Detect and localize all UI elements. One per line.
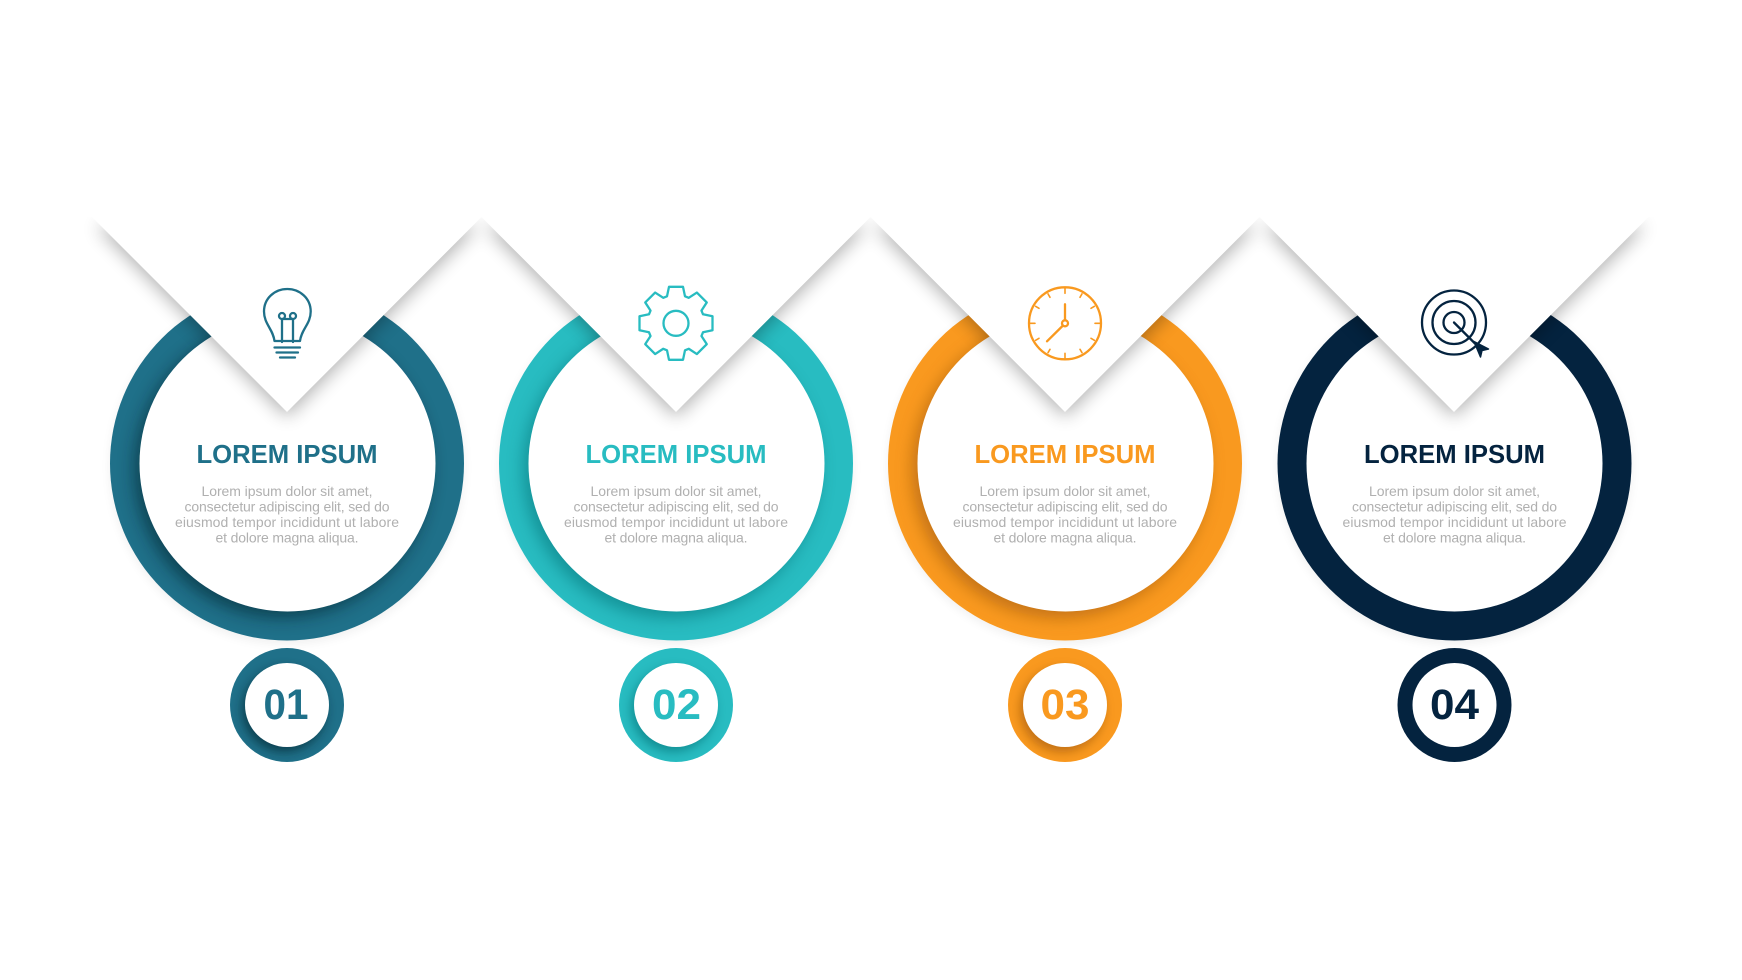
body text 02: et dolore magna aliqua. (604, 530, 748, 546)
body text 03: et dolore magna aliqua. (994, 530, 1136, 546)
body text 04: eiusmod tempor incididunt ut labore (1342, 514, 1567, 530)
heading 04: LOREM IPSUM (1364, 439, 1545, 469)
body text 03: Lorem ipsum dolor sit amet, (980, 483, 1150, 499)
body text 04: et dolore magna aliqua. (1383, 530, 1526, 546)
body text 01 (175, 483, 399, 546)
panel: step 02 (499, 286, 853, 762)
icon: clock (1029, 287, 1101, 359)
body text 04: Lorem ipsum dolor sit amet, (1369, 483, 1540, 499)
number badge 01: 01 (264, 681, 308, 729)
number badge 03 (1008, 648, 1122, 762)
ring 01 (110, 286, 464, 644)
body text 02 (564, 483, 788, 546)
number badge 03: 03 (1040, 681, 1090, 729)
body text 01: Lorem ipsum dolor sit amet, (202, 483, 372, 499)
body text 02: Lorem ipsum dolor sit amet, (590, 483, 762, 499)
body text 04 (1342, 483, 1567, 546)
ring 03 (888, 286, 1242, 644)
body text 01: consectetur adipiscing elit, sed do (184, 498, 390, 514)
body text 01: eiusmod tempor incididunt ut labore (175, 514, 399, 530)
zigzag chevron band with drop shadows (0, 0, 1742, 417)
icon: gear (640, 287, 712, 360)
body text 01: et dolore magna aliqua. (216, 530, 358, 546)
number badge 01 (230, 648, 344, 762)
body text 04: consectetur adipiscing elit, sed do (1352, 498, 1557, 514)
icon: target with arrow (1422, 290, 1488, 357)
number badge 04: 04 (1430, 681, 1479, 729)
heading 02: LOREM IPSUM (586, 439, 766, 469)
panel: step 04 (1278, 286, 1632, 762)
body text 03: eiusmod tempor incididunt ut labore (953, 514, 1177, 530)
icon: light bulb (264, 289, 311, 358)
number badge 04 (1398, 648, 1512, 762)
body text 03 (953, 483, 1177, 546)
body text 02: consectetur adipiscing elit, sed do (574, 498, 779, 514)
heading 01: LOREM IPSUM (196, 439, 378, 469)
heading 03: LOREM IPSUM (974, 439, 1156, 469)
ring 04 (1278, 286, 1632, 644)
panel: step 01 (110, 286, 464, 762)
panel: step 03 (888, 286, 1242, 762)
ring 02 (499, 286, 853, 644)
number badge 02 (619, 648, 733, 762)
body text 02: eiusmod tempor incididunt ut labore (564, 514, 788, 530)
number badge 02: 02 (652, 681, 701, 729)
body text 03: consectetur adipiscing elit, sed do (962, 498, 1168, 514)
